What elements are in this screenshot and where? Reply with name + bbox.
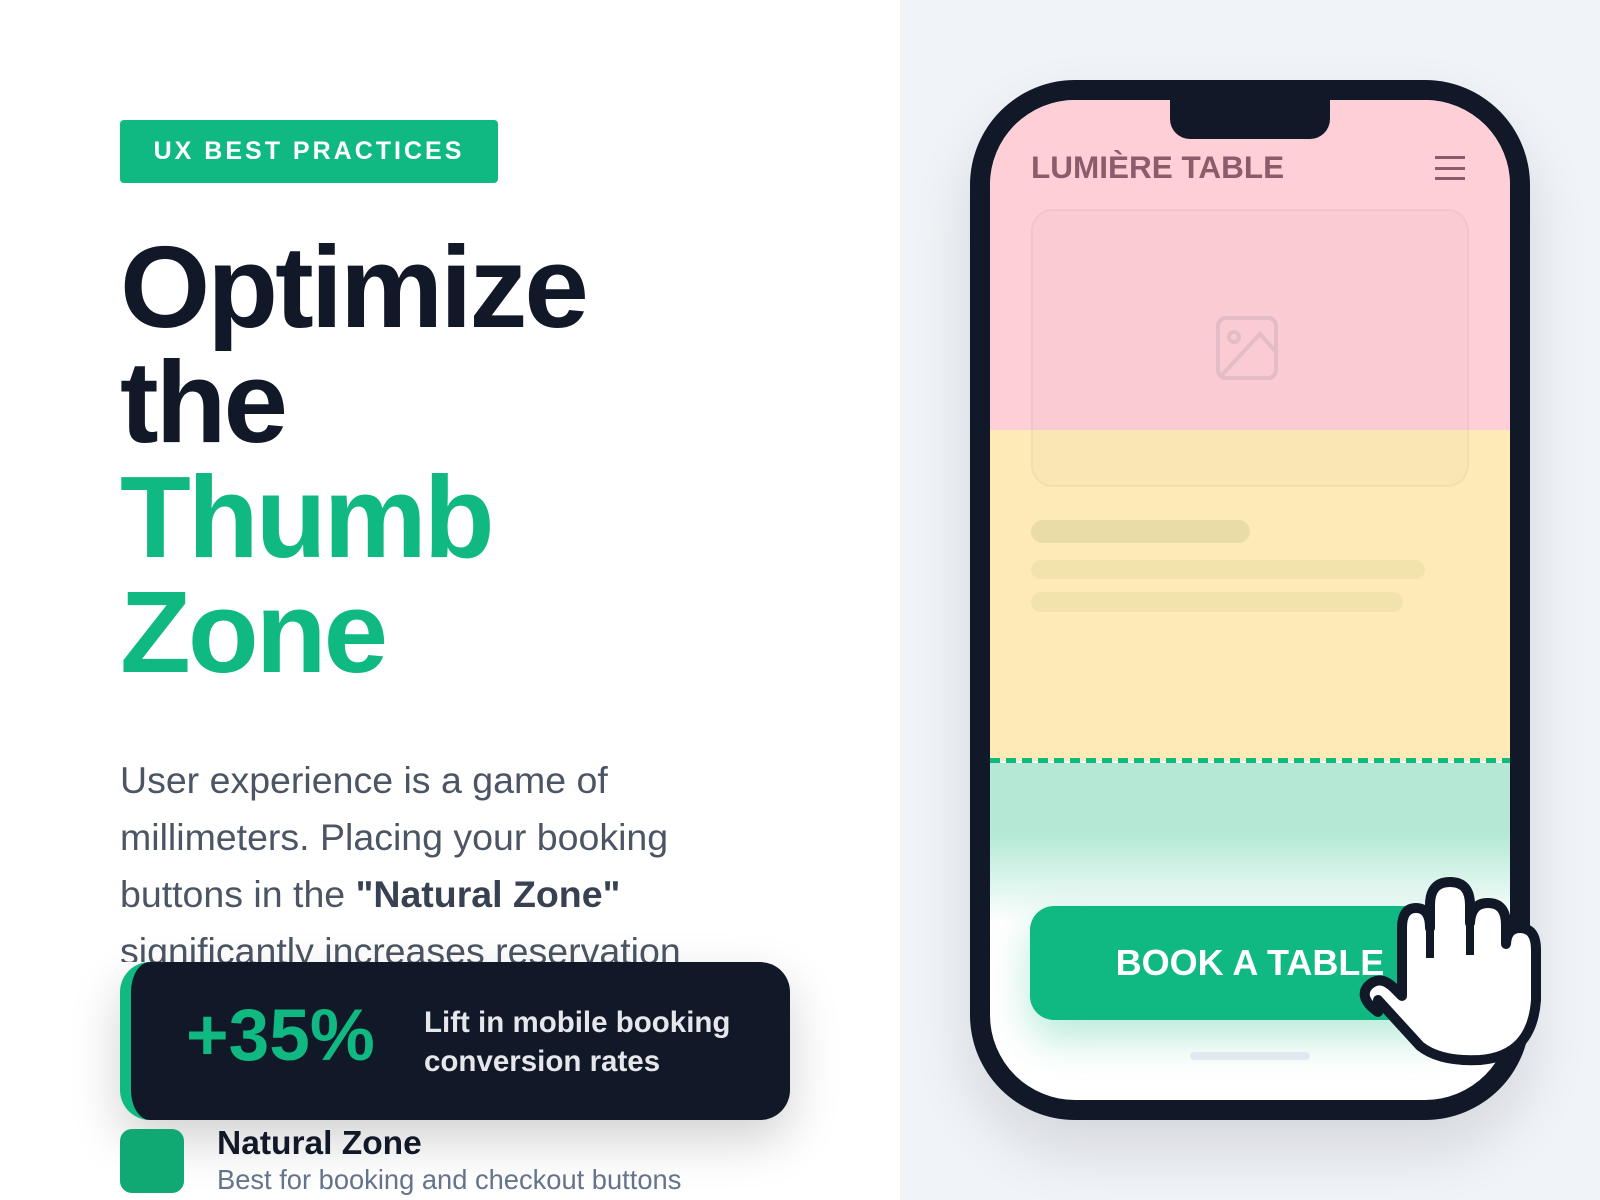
stat label: Lift in mobile booking: [424, 1006, 730, 1039]
app title: LUMIÈRE TABLE: [1031, 149, 1284, 185]
headline: the: [120, 337, 285, 467]
home indicator: [1190, 1052, 1310, 1060]
paragraph: User experience is a game of: [120, 759, 608, 801]
skeleton text bars: [1031, 520, 1425, 612]
phone: [970, 80, 1530, 1120]
stat label: [424, 1006, 730, 1078]
headline: Optimize: [120, 222, 586, 352]
headline: Thumb: [120, 452, 492, 582]
legend: natural zone: [120, 1125, 681, 1195]
headline: [120, 222, 586, 697]
stat card: [120, 962, 790, 1120]
book button: [1030, 906, 1470, 1020]
badge: UX BEST PRACTICES: [154, 137, 464, 165]
legend: natural zone: Best for booking and checkout buttons: [217, 1164, 681, 1195]
paragraph: buttons in the "Natural Zone": [120, 873, 620, 915]
left panel: [0, 0, 900, 1200]
notch: [1170, 100, 1330, 139]
icon: hamburger menu: [1435, 156, 1465, 180]
headline: Zone: [120, 567, 385, 697]
legend: natural zone: Natural Zone: [217, 1125, 422, 1162]
paragraph: [120, 759, 681, 962]
image placeholder: [1031, 209, 1469, 487]
screen: [990, 100, 1510, 1100]
badge: [120, 120, 498, 183]
stat label: conversion rates: [424, 1045, 660, 1078]
icon: image: [1216, 316, 1278, 380]
paragraph: millimeters. Placing your booking: [120, 816, 668, 858]
stat number: +35%: [186, 995, 375, 1076]
book button: BOOK A TABLE: [1116, 942, 1384, 983]
